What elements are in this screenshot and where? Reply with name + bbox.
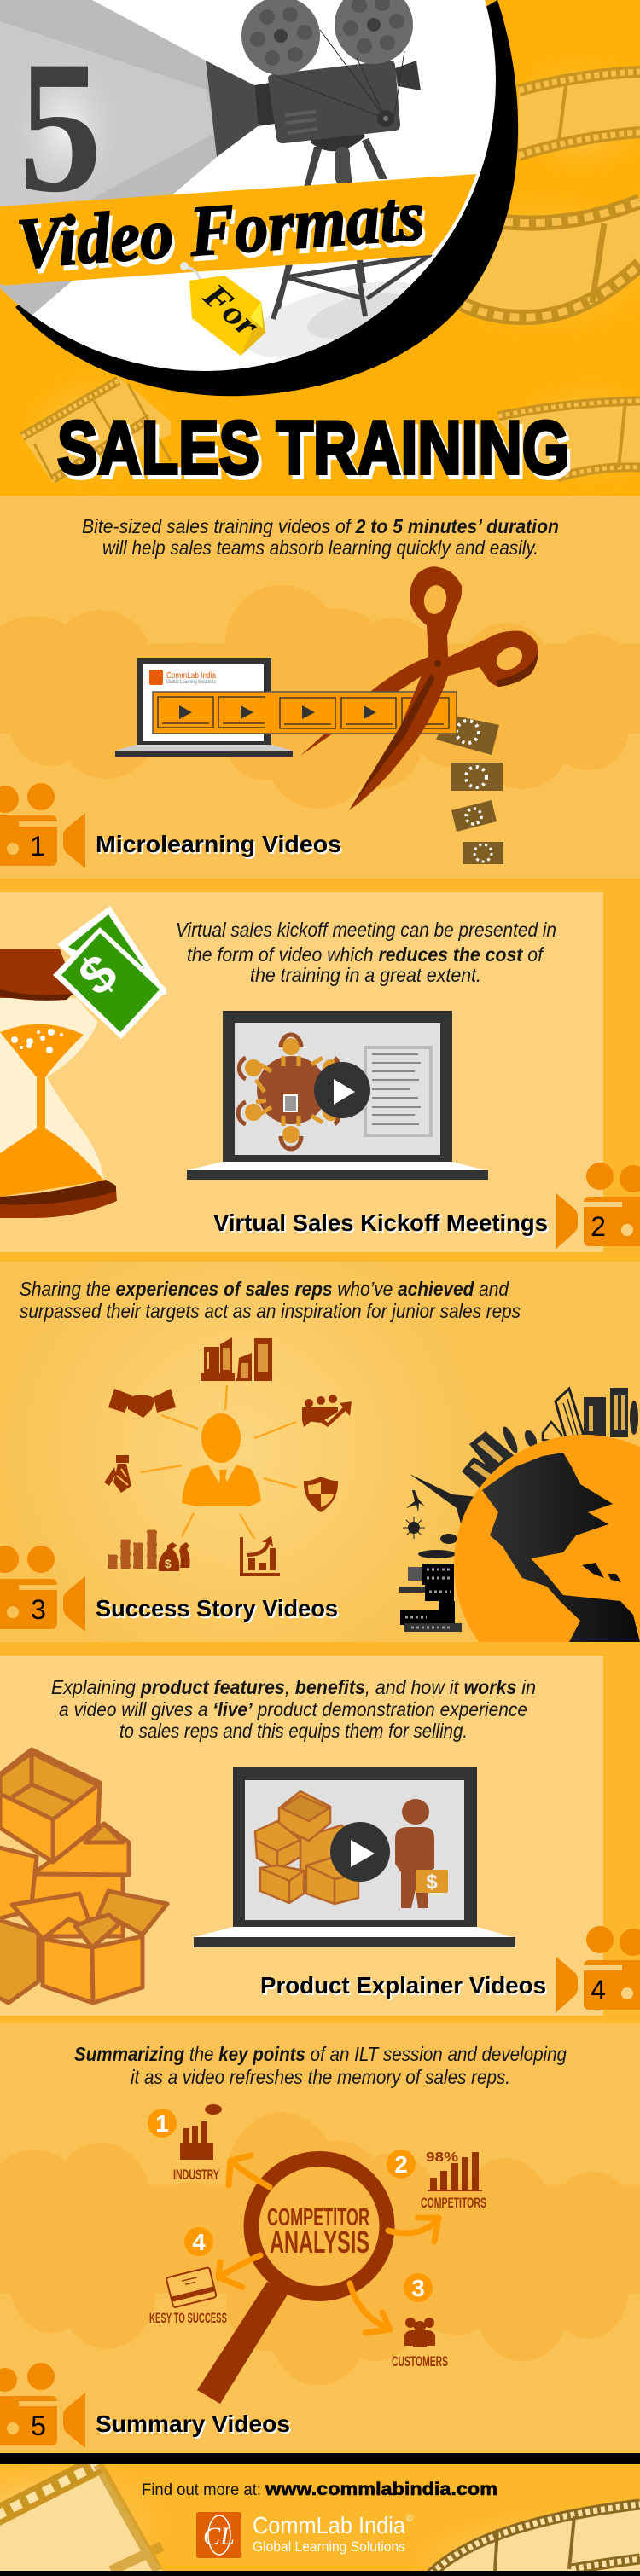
icon: camera 2: 2 [591, 1211, 606, 1242]
icon: camera 1: 1 [30, 831, 45, 862]
document [365, 1047, 431, 1135]
cityscape: left [399, 1474, 478, 1632]
icon: team growth [302, 1395, 352, 1427]
footer link: Find out more at: [142, 2481, 261, 2499]
text: success story description [20, 1278, 521, 1322]
heading: product explainer videos: Product Explainer Videos [262, 1974, 548, 2000]
film strip: behind sales training [486, 367, 640, 503]
icon: money: $ [68, 943, 128, 1007]
icon: money [53, 906, 167, 1039]
title banner [0, 174, 477, 286]
icon: laptop with logo [115, 658, 293, 757]
cityscape: top [462, 1388, 638, 1490]
footer film strips [0, 2464, 640, 2571]
icon: laptop with meeting video [187, 1011, 488, 1180]
point 2: competitors [387, 2150, 486, 2211]
icon: camera 3: 3 [31, 1594, 46, 1625]
icon: camera 4: 4 [591, 1975, 606, 2005]
icon: camera 5 [0, 2363, 85, 2448]
magnifier label [267, 2204, 369, 2260]
point 2: competitors: COMPETITORS [421, 2195, 486, 2211]
text: product explainer description [51, 1676, 536, 1742]
icon: laptop with logo: CommLab India [166, 671, 216, 681]
footer [0, 2448, 640, 2576]
heading: microlearning videos: Microlearning Videos [97, 833, 343, 859]
point 1: industry: 1 [155, 2110, 169, 2137]
text: kickoff description [176, 919, 556, 986]
heading: virtual sales kickoff meetings: Virtual Sales Kickoff Meetings [215, 1211, 550, 1238]
title: video formats: Video Formats [17, 181, 430, 289]
arrows [218, 2155, 439, 2333]
panel: microlearning videos [0, 496, 640, 879]
icon: camera 5: 5 [31, 2411, 46, 2441]
number 5: 5 [19, 23, 102, 232]
text: kickoff description: Virtual sales kickoff meeting can be presented in [176, 919, 556, 941]
for tag [180, 262, 266, 356]
text: success story description: Sharing the experiences of sales reps who’ve achieved and [20, 1278, 509, 1300]
icon: businessman hub [141, 1385, 297, 1539]
icon: scissors front blade [349, 566, 462, 810]
text: summary description: it as a video refreshes the memory of sales reps. [131, 2066, 510, 2088]
white disc [0, 0, 496, 371]
footer link: www.commlabindia.com [265, 2480, 497, 2499]
salesperson: $ [426, 1871, 438, 1894]
heading: product explainer videos: Product Explainer Videos [260, 1972, 546, 1999]
product boxes [255, 1791, 358, 1904]
icon: laptop with logo: Global Learning Solutions [166, 680, 216, 685]
point 1: industry [148, 2104, 222, 2183]
icon: shield [304, 1477, 338, 1512]
logo [196, 2512, 413, 2558]
icon: growth chart [240, 1535, 280, 1576]
panel: product explainer videos [0, 1656, 640, 2023]
film camera projector [206, 0, 431, 319]
point 2: competitors: 2 [394, 2151, 408, 2178]
text: success story description: surpassed their targets act as an inspiration for junior sales reps [20, 1300, 521, 1322]
section divider [0, 879, 640, 892]
film strips: upper right [457, 60, 640, 331]
logo: © [406, 2514, 413, 2524]
logo: CommLab India [253, 2512, 405, 2538]
icon: camera 1 [0, 783, 85, 868]
projector light beam [0, 0, 217, 316]
heading: summary videos: Summary Videos [96, 2411, 290, 2437]
intro text [82, 515, 559, 559]
footer link [142, 2480, 497, 2499]
text: summary description: Summarizing the key points of an ILT session and developing [74, 2043, 567, 2065]
icon: falling film pieces [436, 714, 503, 864]
point 3: customers: 3 [411, 2275, 425, 2301]
logo: CL [203, 2522, 235, 2550]
panel: virtual sales kickoff [0, 892, 640, 1262]
salesperson [395, 1799, 448, 1908]
point 3: customers: CUSTOMERS [392, 2353, 448, 2370]
film strip: lower left [4, 358, 183, 503]
title: video formats: Video Formats [15, 176, 427, 284]
text: product explainer description: to sales reps and this equips them for selling. [119, 1720, 468, 1742]
text: product explainer description: a video will gives a ‘live’ product demonstration experience [59, 1698, 527, 1720]
magnifier [197, 2159, 387, 2404]
icon: coins and money bags: $ [165, 1557, 172, 1570]
panel: summary videos [0, 2023, 640, 2453]
point 2: competitors: 98% [426, 2150, 458, 2165]
point 4: keys to success [149, 2227, 227, 2326]
icon: camera 4 [556, 1926, 640, 2012]
cloud background [0, 2112, 640, 2385]
text: kickoff description: the training in a great extent. [250, 964, 481, 986]
heading: success story videos: Success Story Videos [97, 1597, 340, 1623]
meeting table [238, 1035, 340, 1149]
magnifier label: ANALYSIS [270, 2225, 369, 2260]
icon: hourglass [0, 949, 117, 1218]
heading: virtual sales kickoff meetings: Virtual Sales Kickoff Meetings [213, 1210, 548, 1236]
icon: laptop with product video [194, 1767, 515, 1947]
icon: scissors back blade [300, 631, 538, 756]
continents [482, 1453, 640, 1642]
point 4: keys to success: 4 [192, 2229, 206, 2255]
icon: globe with cityscape [399, 1386, 640, 1642]
icon: handshake [108, 1389, 176, 1418]
point 3: customers [392, 2273, 448, 2370]
text: summary description [74, 2043, 567, 2088]
film strip with play frames [153, 692, 457, 734]
cloud background [0, 585, 640, 809]
tripod shadow [249, 254, 432, 358]
intro text: will help sales teams absorb learning quickly and easily. [102, 537, 538, 559]
point 1: industry: INDUSTRY [173, 2167, 219, 2183]
heading: success story videos: Success Story Videos [96, 1595, 338, 1622]
icon: camera 2 [556, 1163, 640, 1249]
black disc crescent [15, 0, 518, 396]
header background [0, 0, 640, 496]
section divider [0, 1642, 640, 1656]
play button [330, 1822, 390, 1882]
heading: summary videos: Summary Videos [97, 2412, 292, 2439]
logo: Global Learning Solutions [253, 2538, 405, 2555]
heading: microlearning videos: Microlearning Videos [96, 831, 341, 857]
magnifier label: COMPETITOR [267, 2204, 369, 2231]
icon: camera 3 [0, 1546, 85, 1632]
icon: coins and money bags [108, 1529, 190, 1571]
icon: buildings [201, 1337, 272, 1381]
point 4: keys to success: KESY TO SUCCESS [149, 2310, 227, 2326]
text: product explainer description: Explaining product features, benefits, and how it works in [51, 1676, 536, 1698]
intro text: Bite-sized sales training videos of 2 to 5 minutes’ duration [82, 515, 559, 537]
icon: tie [104, 1455, 131, 1493]
text: kickoff description: the form of video which reduces the cost of [187, 943, 544, 966]
icon: stack of boxes [0, 1749, 167, 2003]
panel: success story videos [0, 1262, 640, 1642]
play button [314, 1062, 370, 1118]
for tag: For [195, 275, 266, 345]
